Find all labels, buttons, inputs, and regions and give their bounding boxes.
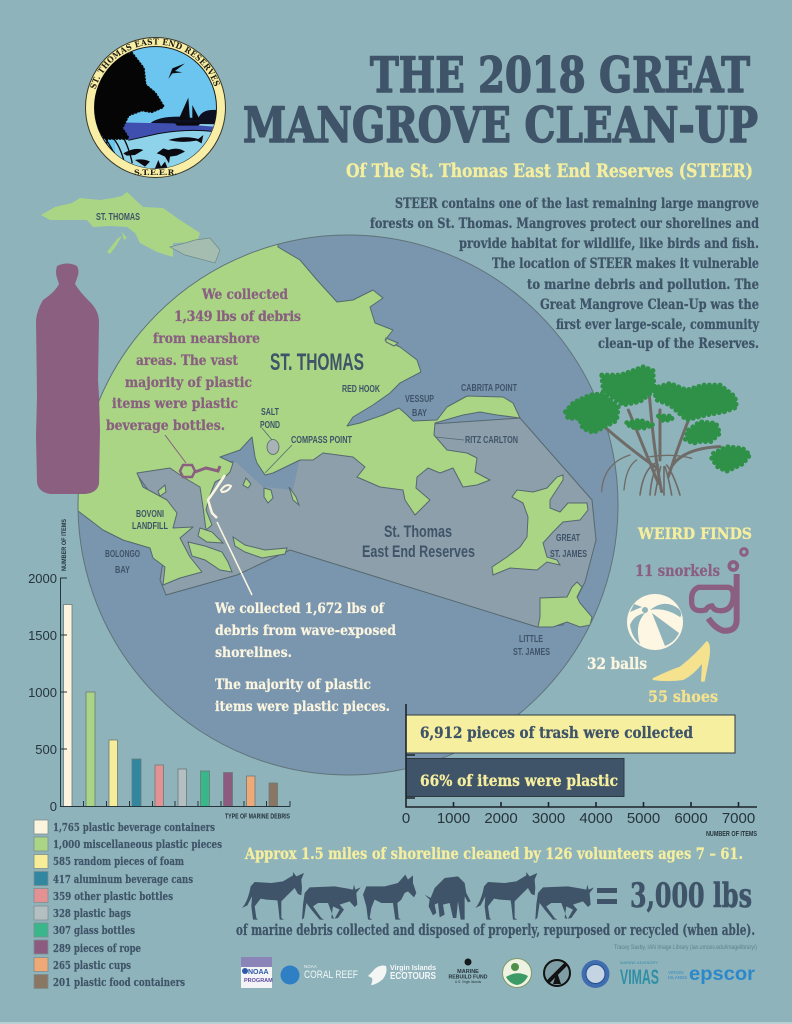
legend: marine debris types: 265 plastic cups (53, 958, 131, 972)
callout: nearshore debris: from nearshore (153, 331, 260, 347)
bar chart: type of marine debris: 2000 (28, 571, 57, 586)
logo: coral reef program: CORAL REEF (304, 969, 358, 981)
legend: marine debris types: 201 plastic food containers (53, 975, 185, 989)
icon: beach ball (627, 594, 683, 650)
map place labels: LITTLE (519, 634, 543, 645)
bar chart: total items vs plastic: 7000 (722, 810, 755, 827)
bar chart: type of marine debris (28, 518, 290, 820)
icon: plastic bottle (36, 264, 100, 494)
map place labels: CABRITA POINT (461, 383, 517, 394)
map: St. Thomas main island (78, 244, 520, 586)
callout: nearshore debris: beverage bottles. (106, 418, 225, 434)
map place labels: ST. JAMES (513, 647, 550, 658)
map: wave-exposed shoreline marker (208, 475, 252, 595)
intro paragraph: first ever large-scale, community (556, 317, 760, 333)
text: equals 3,000 lbs (597, 876, 752, 916)
callout: nearshore debris: areas. The vast (136, 353, 238, 369)
callout: wave-exposed shoreline debris: items were plastic pieces. (215, 699, 390, 715)
callout: nearshore debris: items were plastic (112, 396, 238, 412)
bar chart: total items vs plastic: NUMBER OF ITEMS (706, 831, 757, 838)
bar chart: total items vs plastic: 0 (402, 810, 410, 827)
callout: nearshore debris: 1,349 lbs of debris (174, 309, 301, 325)
logo: VIMAS: MARINE ADVISORY (620, 960, 658, 965)
logo: coral reef program: NOAA (304, 964, 317, 969)
map place labels: RED HOOK (342, 384, 381, 395)
logo: NOAA marine debris program: PROGRAM (244, 978, 273, 984)
text: shoes count: 55 shoes (648, 687, 718, 706)
legend: marine debris types: 1,765 plastic beverage containers (53, 820, 215, 834)
title (243, 46, 758, 154)
title: THE 2018 GREAT (370, 46, 750, 104)
map place labels: BOVONI (136, 508, 164, 520)
map: small islands (158, 338, 398, 572)
text: equals 3,000 lbs: 3,000 lbs (630, 876, 752, 916)
logo: NOAA marine debris program: NOAA (248, 969, 269, 976)
legend: marine debris types (34, 820, 222, 989)
map: bay water inside boundary (232, 458, 300, 490)
map place labels: BOLONGO (105, 548, 140, 560)
map place labels: GREAT (556, 533, 580, 544)
map place labels: LANDFILL (132, 520, 168, 532)
bar: total pieces of trash (406, 715, 735, 753)
intro paragraph: The location of STEER makes it vulnerable (492, 256, 759, 272)
bar chart: type of marine debris: 500 (35, 742, 57, 757)
logo: VIMAS (620, 960, 659, 989)
map: reserve boundary area (130, 418, 596, 627)
legend: marine debris types: 307 glass bottles (53, 923, 135, 937)
logo: Virgin Islands Ecotours: Virgin Islands (390, 965, 436, 972)
callout: nearshore debris (106, 287, 301, 434)
bar chart: total items vs plastic: 1000 (437, 810, 470, 827)
logo: STEER seal: S.T.E.E.R. (134, 168, 177, 177)
logo: Marine Rebuild Fund: MARINE (457, 969, 479, 975)
bar chart: total items vs plastic (402, 704, 757, 838)
map: nearshore site marker (165, 435, 220, 477)
map place labels: POND (260, 420, 280, 431)
bar: plastic share: 66% of items were plastic (420, 771, 618, 790)
bar chart: total items vs plastic: 4000 (579, 810, 613, 827)
logo: VIMAS: VIMAS (620, 966, 659, 989)
map place labels: St. Thomas (384, 522, 452, 541)
legend: marine debris types: 328 plastic bags (53, 906, 131, 920)
intro paragraph (370, 196, 760, 352)
callout: wave-exposed shoreline debris (214, 601, 396, 715)
logo: VI EPSCoR: epscor (689, 964, 756, 985)
bar: total pieces of trash: 6,912 pieces of trash were collected (420, 723, 693, 742)
logo: STEER seal (85, 37, 226, 178)
locator map: St. Thomas: ST. THOMAS (96, 212, 140, 223)
icon: six donkeys (242, 872, 594, 920)
map place labels: SALT (261, 407, 279, 418)
text: image credit: Tracey Saxby, IAN Image Library (ian.umces.edu/imagelibrary/) (614, 944, 757, 951)
logo: Marine Rebuild Fund (449, 958, 488, 984)
legend: marine debris types: 417 aluminum beverage cans (53, 872, 193, 886)
logo: coral reef program (280, 964, 358, 984)
logo: VI EPSCoR: VIRGIN (668, 970, 684, 975)
text: shoreline and volunteers: Approx 1.5 miles of shoreline cleaned by 126 volunteers ages 7 – 61. (244, 844, 743, 863)
intro paragraph: provide habitat for wildlife, like birds and fish. (459, 236, 759, 252)
logo: STEER seal: ST. THOMAS EAST END RESERVES (90, 38, 220, 89)
callout: wave-exposed shoreline debris: We collected 1,672 lbs of (214, 601, 386, 617)
map place labels: BAY (412, 407, 427, 419)
bar chart: total items vs plastic: 3000 (532, 810, 565, 827)
map place labels: RITZ CARLTON (465, 435, 518, 446)
bar chart: type of marine debris: 0 (50, 799, 57, 814)
intro paragraph: to marine debris and pollution. The (527, 277, 759, 293)
map place labels (105, 349, 587, 658)
bar chart: type of marine debris: 1500 (28, 628, 57, 643)
callout: wave-exposed shoreline debris: The majority of plastic (215, 677, 371, 693)
map: Little St. James (538, 582, 592, 627)
bar chart: total items vs plastic: 6000 (674, 810, 708, 827)
icon: mangrove tree (565, 367, 750, 495)
logo: VI EPSCoR: ISLANDS (668, 975, 687, 980)
icon: snorkel (692, 549, 747, 631)
main map circle (78, 234, 618, 776)
intro paragraph: clean-up of the Reserves. (598, 336, 759, 352)
subtitle: Of The St. Thomas East End Reserves (STEER) (346, 160, 753, 182)
legend: marine debris types: 585 random pieces of foam (53, 854, 184, 868)
locator map: St. Thomas (41, 192, 220, 263)
map place labels: ST. THOMAS (270, 349, 364, 376)
intro paragraph: Great Mangrove Clean-Up was the (540, 297, 759, 313)
logo: blue ring seal (582, 960, 610, 988)
intro paragraph: forests on St. Thomas. Mangroves protect our shorelines and (370, 216, 759, 232)
logo: Virgin Islands Ecotours: ECOTOURS (390, 971, 436, 982)
logo: Virgin Islands Ecotours (368, 965, 436, 985)
callout: nearshore debris: majority of plastic (125, 375, 252, 391)
logo: Marine Rebuild Fund: REBUILD FUND (449, 974, 488, 980)
bar chart: type of marine debris: NUMBER OF ITEMS (61, 518, 68, 571)
bar chart: total items vs plastic: 5000 (627, 810, 660, 827)
map place labels: BAY (115, 564, 130, 576)
logo: round green seal (502, 958, 532, 988)
heading: weird finds: WEIRD FINDS (637, 524, 752, 543)
legend: marine debris types: 289 pieces of rope (53, 941, 141, 955)
map place labels: VESSUP (405, 393, 434, 405)
logo: Marine Rebuild Fund: U.S. Virgin Islands (455, 980, 481, 984)
logo: NOAA marine debris program (241, 957, 273, 988)
callout: wave-exposed shoreline debris: debris from wave-exposed (215, 623, 396, 639)
bar chart: total items vs plastic: 2000 (484, 810, 518, 827)
map: Salt Pond (267, 440, 279, 454)
intro paragraph: STEER contains one of the last remaining large mangrove (395, 196, 759, 212)
text: balls count: 32 balls (587, 654, 647, 673)
logo: black ring seal (544, 960, 570, 986)
map place labels: ST. JAMES (550, 549, 587, 560)
map: leader lines (262, 428, 464, 473)
bar chart: type of marine debris: 1000 (28, 685, 57, 700)
callout: nearshore debris: We collected (201, 287, 288, 303)
bar: plastic share (406, 758, 624, 796)
legend: marine debris types: 1,000 miscellaneous plastic pieces (53, 837, 222, 851)
callout: wave-exposed shoreline debris: shorelines. (215, 645, 292, 661)
icon: high-heel shoe (653, 641, 710, 682)
text: snorkels count: 11 snorkels (635, 561, 720, 580)
bar chart: type of marine debris: TYPE OF MARINE DEBRIS (225, 814, 290, 820)
map place labels: COMPASS POINT (291, 435, 352, 446)
map: Great St. James (492, 475, 588, 575)
map place labels: East End Reserves (362, 542, 475, 561)
legend: marine debris types: 359 other plastic bottles (53, 889, 173, 903)
